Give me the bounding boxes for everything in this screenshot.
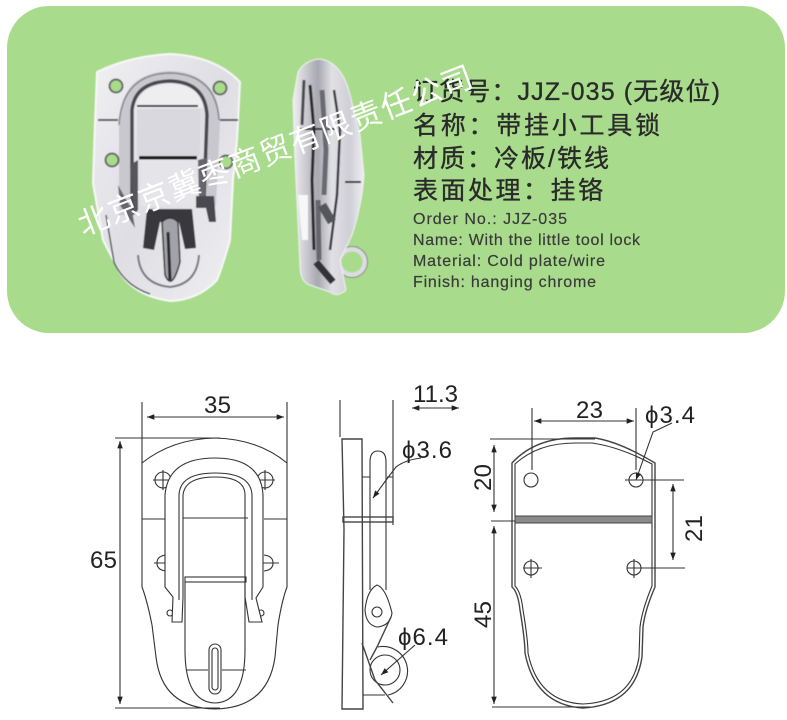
dimension: phi 3.6: ϕ3.6 [402, 437, 452, 464]
dimension: phi 6.4 [381, 624, 448, 675]
photo: lock front view [93, 54, 240, 301]
dimension: 21: 21 [681, 515, 708, 542]
drawing: front view [90, 392, 287, 709]
drawing: side view [340, 381, 459, 709]
dimension: phi 3.4: ϕ3.4 [645, 402, 695, 429]
finish Chinese: 表面处理：挂铬 [413, 177, 603, 205]
dimension: 45: 45 [470, 601, 497, 628]
finish English: Finish: hanging chrome [413, 274, 596, 291]
dimension: 65: 65 [90, 547, 117, 574]
panel: product information [7, 6, 785, 333]
dimension: phi 3.6 [373, 437, 452, 498]
dimension: 35 [142, 392, 287, 463]
dimension: 11.3: 11.3 [413, 381, 458, 408]
dimension: 23 [532, 397, 636, 470]
order number English: Order No.: JJZ-035 [413, 211, 567, 228]
dimension: 20: 20 [470, 464, 497, 491]
order number Chinese: 订货号：JJZ-035 (无级位) [413, 78, 720, 106]
drawing: back plate view [470, 397, 708, 708]
product specification text [413, 78, 720, 291]
material Chinese: 材质：冷板/铁线 [413, 145, 609, 173]
dimension: phi 6.4: ϕ6.4 [398, 624, 448, 651]
dimension: 23: 23 [576, 397, 603, 424]
dimension: 20 [470, 439, 595, 521]
name Chinese: 名称：带挂小工具锁 [413, 112, 660, 140]
dimension: 21 [625, 480, 708, 560]
material English: Material: Cold plate/wire [413, 253, 605, 270]
name English: Name: With the little tool lock [413, 232, 641, 249]
dimension: 65 [90, 438, 220, 708]
watermark: 北京京冀枣商贸有限责任公司 [73, 59, 478, 243]
dimension: 35: 35 [204, 392, 231, 419]
dimension: phi 3.4 [636, 402, 695, 480]
photo: lock side view [293, 59, 368, 295]
